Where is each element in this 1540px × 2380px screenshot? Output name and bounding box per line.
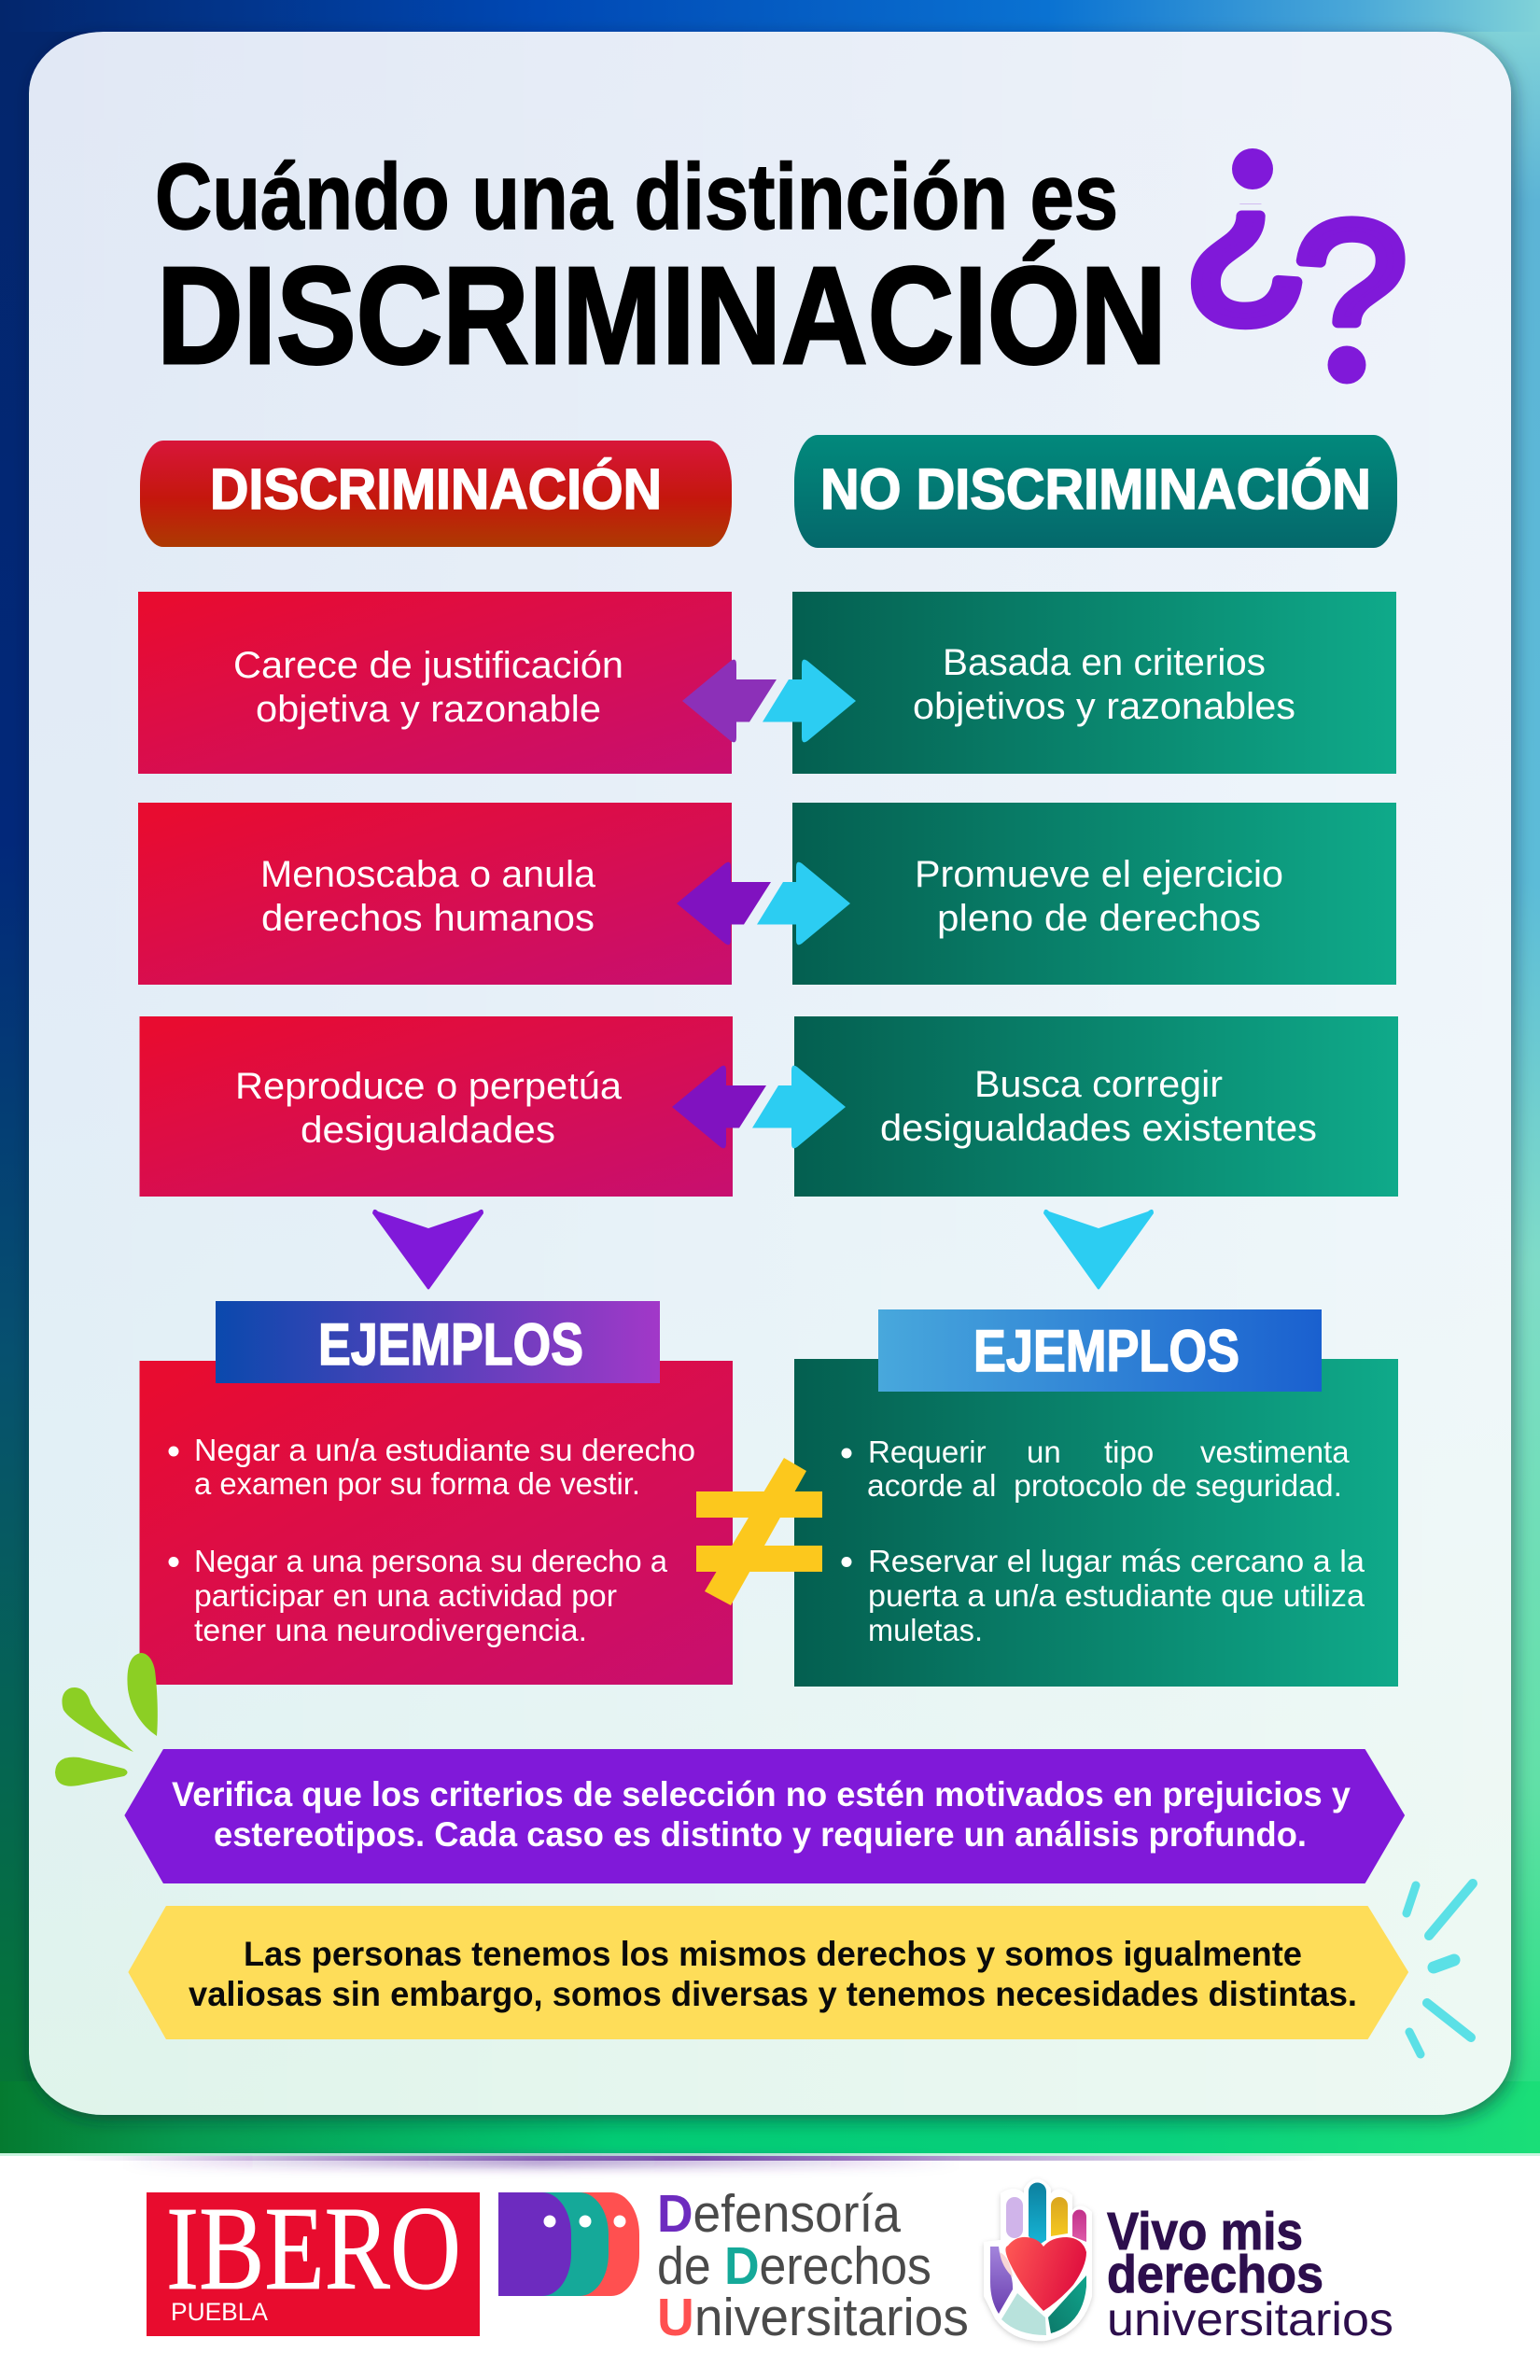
logo: Vivo mis derechos universitarios [1107, 2202, 1393, 2345]
arrow down: left [372, 1210, 483, 1290]
row 1 right box [792, 592, 1396, 774]
row 3 left box: desigualdades [301, 1110, 555, 1151]
logo: Defensoría text: Universitarios [657, 2288, 969, 2347]
row 1 left box: objetiva y razonable [256, 689, 601, 730]
panel: right examples [794, 1309, 1398, 1687]
callout: purple banner [125, 1750, 1404, 1883]
right example 2: Reservar el lugar más cercano a la [868, 1544, 1365, 1578]
column header: no discriminación [794, 435, 1397, 548]
callout: purple banner: estereotipos. Cada caso es distinto y requiere un análisis profundo. [214, 1815, 1307, 1854]
icon: green sparks [55, 1653, 158, 1786]
logo: IBERO Puebla: IBERO [166, 2182, 461, 2315]
row 2 right box [792, 803, 1396, 985]
icon: question marks: ? [1294, 182, 1407, 400]
icon: cyan sparks [1407, 1883, 1473, 2054]
title [155, 145, 1167, 393]
right examples tab [878, 1309, 1322, 1392]
logo: Defensoría text: Defensoría [657, 2184, 901, 2244]
arrows: row 1 [682, 660, 856, 742]
icon: not equal sign [696, 1458, 822, 1605]
row 2 left box: derechos humanos [261, 898, 595, 939]
row 3 right box: Busca corregir [974, 1064, 1223, 1105]
row 3 right box [794, 1016, 1398, 1197]
row 3 right box: desigualdades existentes [880, 1108, 1317, 1149]
left example 2: Negar a una persona su derecho a [194, 1544, 668, 1578]
right example 1 [842, 1435, 1350, 1503]
panel: left examples [140, 1301, 733, 1685]
left examples tab [216, 1301, 660, 1383]
row 1 right box: Basada en criterios [943, 642, 1266, 683]
row 1 left box [138, 592, 732, 774]
callout: purple banner: Verifica que los criterios de selección no estén motivados en prejuicios y [172, 1775, 1351, 1813]
left example 1: Negar a un/a estudiante su derecho [194, 1433, 695, 1467]
logo: IBERO Puebla: PUEBLA [171, 2298, 268, 2326]
column header: no discriminación: NO DISCRIMINACIÓN [820, 457, 1371, 521]
row 1 right box: objetivos y razonables [913, 686, 1295, 727]
left example 1 [168, 1433, 695, 1501]
logo: Vivo mis derechos universitarios: Vivo mis [1107, 2202, 1303, 2261]
column header: discriminación [140, 441, 732, 547]
right example 1: un [1027, 1435, 1061, 1469]
right example 1: vestimenta [1200, 1435, 1350, 1469]
left examples tab: EJEMPLOS [318, 1312, 583, 1378]
logo: Defensoría mark [498, 2192, 639, 2296]
footer background [0, 2153, 1540, 2380]
arrow down: right [1043, 1210, 1154, 1290]
right example 2 [842, 1544, 1365, 1647]
row 2 right box: Promueve el ejercicio [915, 854, 1283, 895]
title: DISCRIMINACIÓN [157, 239, 1167, 393]
right example 1: tipo [1104, 1435, 1154, 1469]
logo: hand with heart [984, 2178, 1092, 2341]
arrows: row 2 [677, 862, 850, 945]
icon: question marks [1191, 148, 1406, 385]
callout: yellow banner: valiosas sin embargo, somos diversas y tenemos necesidades distintas. [189, 1975, 1357, 2013]
row 3 left box: Reproduce o perpetúa [235, 1066, 623, 1107]
callout: yellow banner: Las personas tenemos los mismos derechos y somos igualmente [244, 1935, 1302, 1973]
left example 1: a examen por su forma de vestir. [194, 1466, 640, 1501]
right examples tab: EJEMPLOS [973, 1319, 1239, 1384]
right example 2: puerta a un/a estudiante que utiliza [868, 1578, 1365, 1613]
logo: Vivo mis derechos universitarios: universitarios [1107, 2293, 1393, 2345]
logo: Vivo mis derechos universitarios: derechos [1107, 2245, 1323, 2304]
title: Cuándo una distinción es [155, 145, 1118, 249]
row 3 left box [140, 1016, 733, 1197]
right example 1: acorde al protocolo de seguridad. [867, 1468, 1342, 1503]
row 2 left box [138, 803, 732, 985]
logo: Defensoría text [657, 2184, 969, 2347]
callout: yellow banner [129, 1907, 1407, 2038]
row 1 left box: Carece de justificación [233, 645, 623, 686]
left example 2: tener una neurodivergencia. [194, 1613, 587, 1647]
column header: discriminación: DISCRIMINACIÓN [210, 457, 662, 521]
arrows: row 3 [672, 1066, 846, 1148]
right example 2: muletas. [868, 1613, 983, 1647]
left example 2 [168, 1544, 668, 1647]
icon: question marks: ¿ [1183, 98, 1311, 333]
row 2 left box: Menoscaba o anula [260, 854, 596, 895]
row 2 right box: pleno de derechos [937, 898, 1261, 939]
left example 2: participar en una actividad por [194, 1578, 617, 1613]
right example 1: Requerir [868, 1435, 987, 1469]
logo: Defensoría text: de Derechos [657, 2236, 931, 2296]
